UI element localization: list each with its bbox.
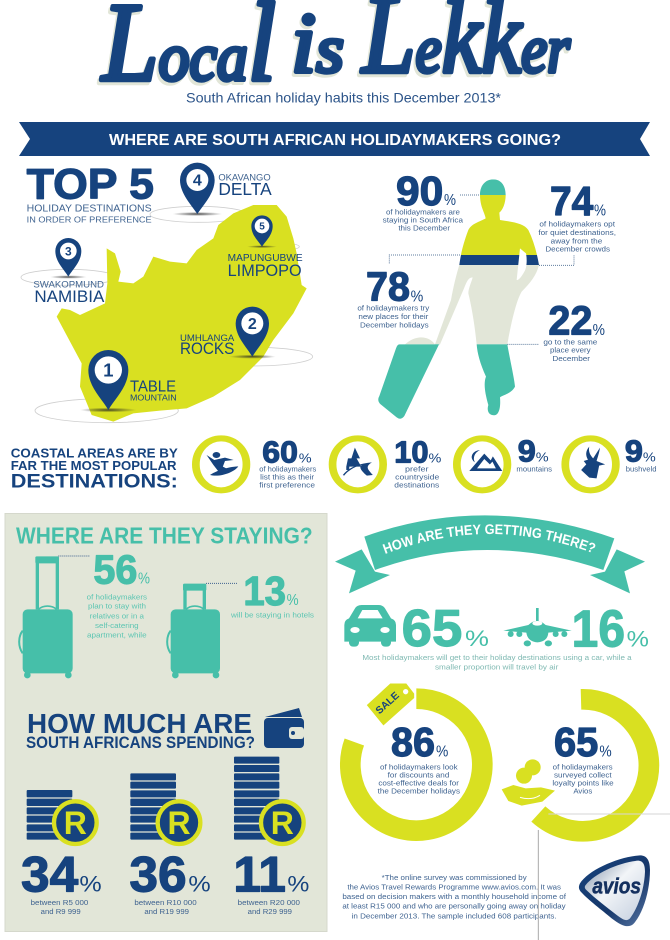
stat: 56%: apartment, while	[87, 630, 147, 639]
stack 11%: %	[287, 872, 309, 897]
stat: 86%: cost-effective deals for	[378, 779, 460, 788]
icon: plane	[503, 608, 572, 646]
pin 4: Okavango Delta: 4	[193, 173, 202, 190]
footnote: based on decision makers with a monthly household income of	[342, 894, 566, 901]
stat: 65% loyalty	[552, 719, 614, 796]
avios logo: avios	[592, 873, 641, 898]
stat: 9% mountains: 9	[518, 435, 536, 469]
subtitle: South African holiday habits this December 2013*	[186, 90, 502, 106]
transport caption	[362, 653, 633, 671]
pin 5: Mapungubwe Limpopo: LIMPOPO	[228, 261, 302, 280]
stat: 10%: destinations	[394, 481, 439, 489]
stat: 56%: plan to stay with	[88, 602, 146, 611]
stat: 13%: 13	[243, 568, 286, 614]
section banner: where are they going: WHERE ARE SOUTH AFRICAN HOLIDAYMAKERS GOING?	[109, 132, 561, 149]
stat: 86%: the December holidays	[378, 787, 460, 796]
panel: traveller statistics	[357, 168, 616, 419]
stat: 16% plane: 16	[572, 600, 625, 658]
pin 1: Table Mountain: TABLE	[130, 379, 176, 396]
stat: 65% loyalty: of holidaymakers	[553, 763, 613, 772]
panel: how are they getting there	[335, 515, 649, 671]
stat: 60%: of holidaymakers	[259, 465, 316, 473]
stack 34%: 34	[21, 847, 79, 903]
pin 3: Swakopmund Namibia: 3	[65, 244, 72, 258]
pin 2: Umhlanga Rocks	[180, 307, 269, 358]
coastal heading: FAR THE MOST POPULAR	[11, 460, 177, 473]
stat: 90%: %	[444, 192, 456, 209]
stat: 56%: %	[138, 570, 150, 587]
stat: 9% bushveld: 9	[625, 435, 643, 469]
top 5 heading: TOP 5	[27, 160, 154, 208]
stat: 9% bushveld: %	[643, 451, 656, 465]
stat: 60%: first preference	[259, 481, 315, 489]
icon: countryside road	[333, 438, 383, 490]
stat: 78%: 78	[366, 264, 410, 310]
panel: top 5 destinations map	[21, 160, 313, 423]
spending heading: SOUTH AFRICANS SPENDING?	[26, 734, 255, 752]
spending heading	[26, 708, 255, 752]
icon: mountains	[457, 438, 507, 490]
stat: 22%: 22	[548, 297, 592, 343]
stack 36%	[129, 773, 211, 916]
stat: 74%: away from the	[551, 238, 602, 245]
title	[100, 0, 570, 105]
donut 86%	[350, 699, 482, 831]
panel: discounts and loyalty	[342, 683, 670, 940]
stat: 74%	[538, 178, 616, 254]
stack 36%: %	[188, 872, 211, 897]
stat: 65% loyalty: 65	[554, 719, 598, 765]
stat: 86%: %	[436, 744, 448, 761]
panel: where are they staying	[16, 522, 314, 678]
stat: 74%: for quiet destinations,	[538, 230, 616, 237]
stack 34%: and R9 999	[41, 907, 81, 916]
stat: 13%: will be staying in hotels	[230, 610, 314, 619]
stat: 22%	[543, 297, 605, 363]
pin shadows	[50, 212, 277, 412]
stack 36%: between R10 000	[134, 898, 197, 907]
stat: 65% car: 65	[402, 599, 462, 657]
footnote: at least R15 000 and who are personally going away on holiday	[342, 904, 566, 911]
pin 1: Table Mountain: MOUNTAIN	[130, 394, 177, 403]
stat: 9% bushveld	[625, 435, 657, 473]
stack 36%: 36	[129, 847, 187, 903]
icon: sale tag: SALE	[374, 690, 402, 717]
top 5 heading: IN ORDER OF PREFERENCE	[27, 215, 152, 225]
pin orbit rings	[21, 206, 313, 423]
stack 34%	[21, 790, 102, 916]
stat: 86%: for discounts and	[388, 771, 449, 780]
pin 4: Okavango Delta	[180, 163, 272, 214]
icon: hand with coins	[502, 759, 555, 806]
stat: 90%: of holidaymakers are	[386, 209, 460, 216]
stat: 90%: this December	[398, 226, 451, 233]
avios logo	[579, 855, 650, 926]
staying heading: WHERE ARE THEY STAYING?	[16, 522, 313, 548]
map of South Africa	[57, 205, 307, 422]
stat: 9% mountains: %	[536, 451, 549, 465]
stat: 86%: of holidaymakers look	[380, 763, 458, 772]
stat: 78%: %	[411, 288, 423, 305]
pin 3: Swakopmund Namibia: NAMIBIA	[34, 287, 105, 306]
stat: 90%: 90	[396, 168, 443, 214]
stack 11%: between R20 000	[238, 898, 300, 907]
stat: 60%: 60	[262, 435, 298, 469]
stat: 60%: list this as their	[260, 473, 314, 481]
stat: 9% mountains	[516, 435, 552, 473]
icon: small suitcase	[167, 584, 220, 678]
stack 11%: R	[271, 805, 294, 841]
stat: 10%	[394, 435, 441, 489]
pin 4: Okavango Delta: DELTA	[218, 179, 272, 199]
pin 5: Mapungubwe Limpopo: 5	[259, 222, 265, 233]
stat: 65% loyalty: loyalty points like	[552, 779, 614, 788]
icon: large suitcase	[19, 556, 73, 678]
pin 1: Table Mountain: 1	[103, 360, 114, 381]
stat: 78%: of holidaymakers try	[357, 306, 430, 313]
pin 5: Mapungubwe Limpopo: MAPUNGUBWE	[228, 253, 303, 264]
stat: 56%	[87, 546, 150, 639]
ribbon banner: HOW ARE THEY GETTING THERE?	[382, 524, 596, 554]
panel: coastal areas row	[11, 435, 657, 492]
stat: 90%	[383, 168, 463, 233]
stat: 22%: %	[593, 322, 605, 339]
stat: 10%: %	[429, 452, 441, 466]
footnote: the Avios Travel Rewards Programme www.avios.com. It was	[347, 884, 562, 891]
stat: 65% car: %	[465, 626, 489, 651]
stat: 65% car	[402, 599, 489, 657]
coastal heading: DESTINATIONS:	[11, 470, 178, 492]
stat: 9% bushveld: bushveld	[626, 465, 657, 473]
icon: antelope	[565, 438, 616, 490]
donut 65%	[538, 699, 649, 831]
icon: wallet	[264, 708, 304, 748]
ribbon banner	[335, 515, 645, 594]
section banner: where are they going	[19, 122, 650, 156]
transport caption: smaller proportion will travel by air	[435, 662, 559, 671]
stat: 86%: 86	[391, 719, 435, 765]
pin 2: Umhlanga Rocks: 2	[248, 316, 257, 333]
stack 34%: between R5 000	[31, 898, 88, 907]
stat: 74%: December crowds	[545, 247, 611, 254]
coastal heading: COASTAL AREAS ARE BY	[11, 447, 178, 461]
stat: 13%: %	[287, 592, 299, 609]
top 5 heading: HOLIDAY DESTINATIONS	[27, 204, 152, 215]
dotted leaders	[58, 556, 237, 583]
pin 3: Swakopmund Namibia: SWAKOPMUND	[33, 279, 105, 289]
stat: 90%: staying in South Africa	[383, 217, 463, 224]
spending heading: HOW MUCH ARE	[27, 708, 252, 739]
footnote	[342, 875, 566, 920]
stat: 65% loyalty: surveyed collect	[554, 771, 612, 780]
pin 4: Okavango Delta: OKAVANGO	[218, 173, 271, 183]
stack 34%: R	[64, 805, 87, 841]
stack 36%: R	[167, 805, 191, 841]
stack 36%: and R19 999	[144, 907, 189, 916]
stat: 65% loyalty: %	[599, 744, 612, 761]
stack 11%: and R29 999	[248, 907, 292, 916]
pin 2: Umhlanga Rocks: UMHLANGA	[180, 333, 234, 343]
stat: 22%: go to the same	[543, 339, 597, 346]
dotted leader lines	[389, 195, 574, 344]
coastal heading	[11, 447, 178, 492]
stat: 9% mountains: mountains	[516, 465, 552, 473]
panel: staying and spending	[5, 514, 327, 932]
stat: 74%: 74	[550, 178, 594, 224]
stat: 10%: countryside	[395, 473, 440, 481]
stat: 56%: 56	[93, 546, 137, 592]
stat: 56%: self-catering	[95, 621, 139, 630]
pin 2: Umhlanga Rocks: ROCKS	[180, 339, 234, 358]
stack 11%: 11	[233, 847, 286, 903]
traveller figure	[378, 177, 543, 419]
stat: 56%: relatives or in a	[90, 611, 145, 620]
stat: 56%: of holidaymakers	[87, 592, 147, 601]
stat: 65% loyalty: Avios	[573, 787, 593, 796]
stat: 74%: %	[594, 203, 606, 220]
stat: 16% plane: %	[627, 627, 649, 652]
pin 5: Mapungubwe Limpopo	[228, 215, 303, 280]
stat: 74%: of holidaymakers opt	[539, 222, 615, 229]
stack 34%: %	[79, 872, 102, 897]
footnote: in December 2013. The sample included 608 participants.	[352, 913, 557, 920]
stack 11%	[233, 757, 309, 916]
stat: 60%: %	[299, 452, 312, 466]
pin 3: Swakopmund Namibia	[33, 238, 105, 306]
stat: 10%: prefer	[405, 465, 429, 473]
stat: 22%: place every	[550, 348, 591, 355]
icon: surfer	[196, 438, 246, 490]
icon: sale tag	[366, 683, 415, 727]
stat: 78%: new places for their	[358, 314, 429, 321]
stat: 13%	[230, 568, 314, 619]
stat: 78%: December holidays	[360, 323, 429, 330]
stat: 86%	[378, 719, 460, 796]
transport caption: Most holidaymakers will get to their holiday destinations using a car, while a	[362, 653, 633, 662]
panel: spending stacks	[21, 757, 309, 916]
stat: 78%	[357, 264, 430, 330]
stat: 60%	[259, 435, 316, 489]
stat: 10%: 10	[394, 435, 429, 469]
footnote: *The online survey was commissioned by	[382, 875, 527, 882]
stat: 22%: December	[552, 356, 591, 363]
icon: car	[344, 605, 396, 647]
pin 1: Table Mountain	[88, 350, 177, 410]
